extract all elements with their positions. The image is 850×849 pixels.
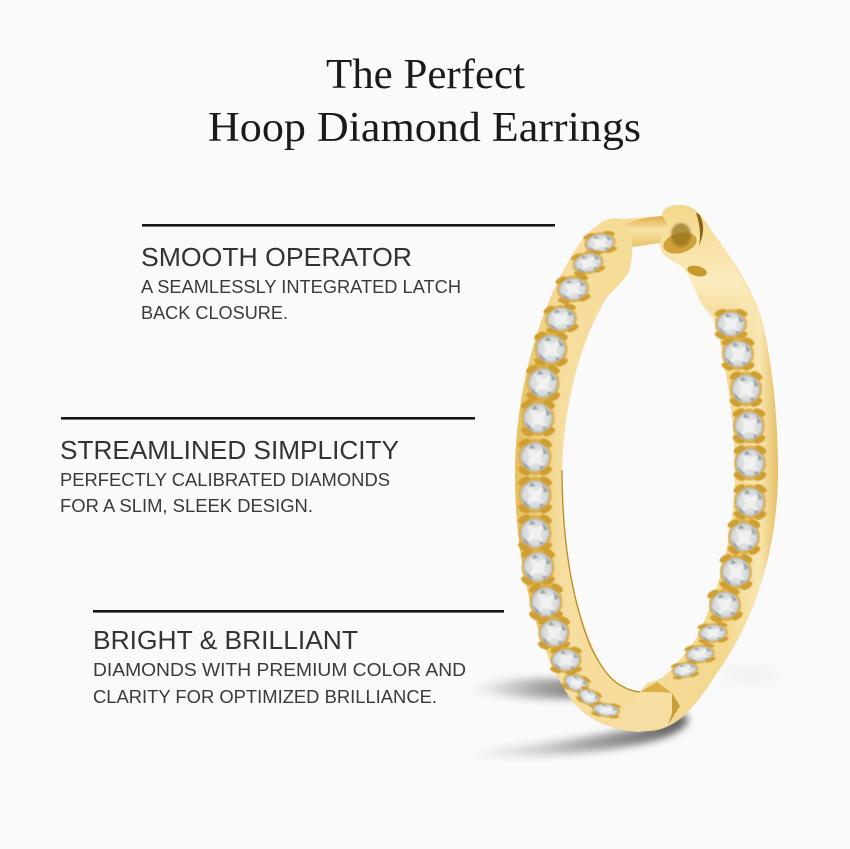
left band top cap	[596, 218, 632, 299]
right diamonds	[669, 307, 768, 682]
bottom clasp step	[608, 682, 672, 732]
hoop earring	[515, 205, 778, 732]
feature: smooth operator: A SEAMLESSLY INTEGRATED LATCH	[141, 276, 461, 297]
earring shadows	[470, 670, 780, 757]
feature: bright and brilliant: DIAMONDS WITH PREMIUM COLOR AND	[93, 659, 466, 680]
gold hoop body	[515, 205, 778, 731]
feature: smooth operator: BACK CLOSURE.	[141, 302, 288, 323]
feature: streamlined simplicity: STREAMLINED SIMPLICITY	[60, 435, 399, 465]
title	[208, 52, 641, 151]
hinge pin	[625, 216, 682, 247]
hinge lever	[660, 205, 762, 335]
title: The Perfect	[326, 52, 525, 98]
inner edge line	[562, 470, 640, 692]
feature: smooth operator: SMOOTH OPERATOR	[141, 242, 412, 272]
feature: streamlined simplicity	[60, 417, 475, 516]
feature: smooth operator	[141, 224, 555, 323]
feature: bright and brilliant: CLARITY FOR OPTIMIZED BRILLIANCE.	[93, 686, 437, 707]
feature: bright and brilliant	[93, 610, 504, 707]
feature: bright and brilliant: BRIGHT & BRILLIANT	[93, 625, 358, 655]
hinge hole	[686, 264, 708, 278]
feature: streamlined simplicity: PERFECTLY CALIBRATED DIAMONDS	[60, 469, 390, 490]
left diamonds	[517, 229, 623, 720]
feature: streamlined simplicity: FOR A SLIM, SLEEK DESIGN.	[60, 495, 313, 516]
hinge recess	[661, 229, 699, 257]
title: Hoop Diamond Earrings	[208, 105, 641, 151]
